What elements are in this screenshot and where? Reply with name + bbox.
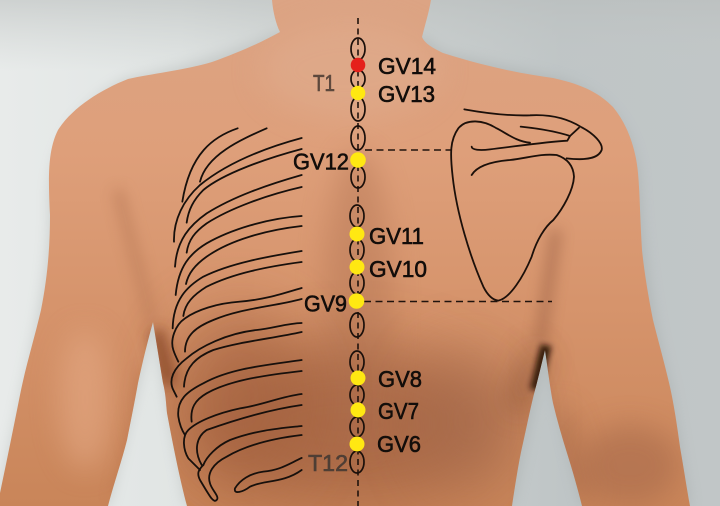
vertebrae [350,38,365,473]
scapula and clavicle line drawing [451,109,602,301]
vertebra labels T1 and T12 [308,70,348,476]
point labels [293,53,436,457]
point labels: GV8 [378,366,422,392]
point labels: GV13 [378,81,435,107]
vertebra labels T1 and T12: T1 [313,70,335,96]
arm shading [555,410,584,500]
armpit shadows [535,345,546,390]
torso shading [200,345,500,505]
rib cage line drawing [171,128,302,501]
vertebra labels T1 and T12: T12 [308,450,348,476]
acupuncture point markers [349,58,366,451]
point labels: GV12 [293,148,349,174]
neck highlight [291,76,408,102]
point labels: GV11 [369,223,424,249]
horizontal dashed guide lines [364,150,552,302]
point labels: GV6 [377,431,421,457]
point labels: GV9 [304,290,347,316]
point GV14 (red) [351,58,365,72]
spine centre dashed line [357,18,359,506]
point labels: GV7 [378,398,419,424]
point labels: GV14 [378,53,436,79]
point labels: GV10 [369,256,427,282]
